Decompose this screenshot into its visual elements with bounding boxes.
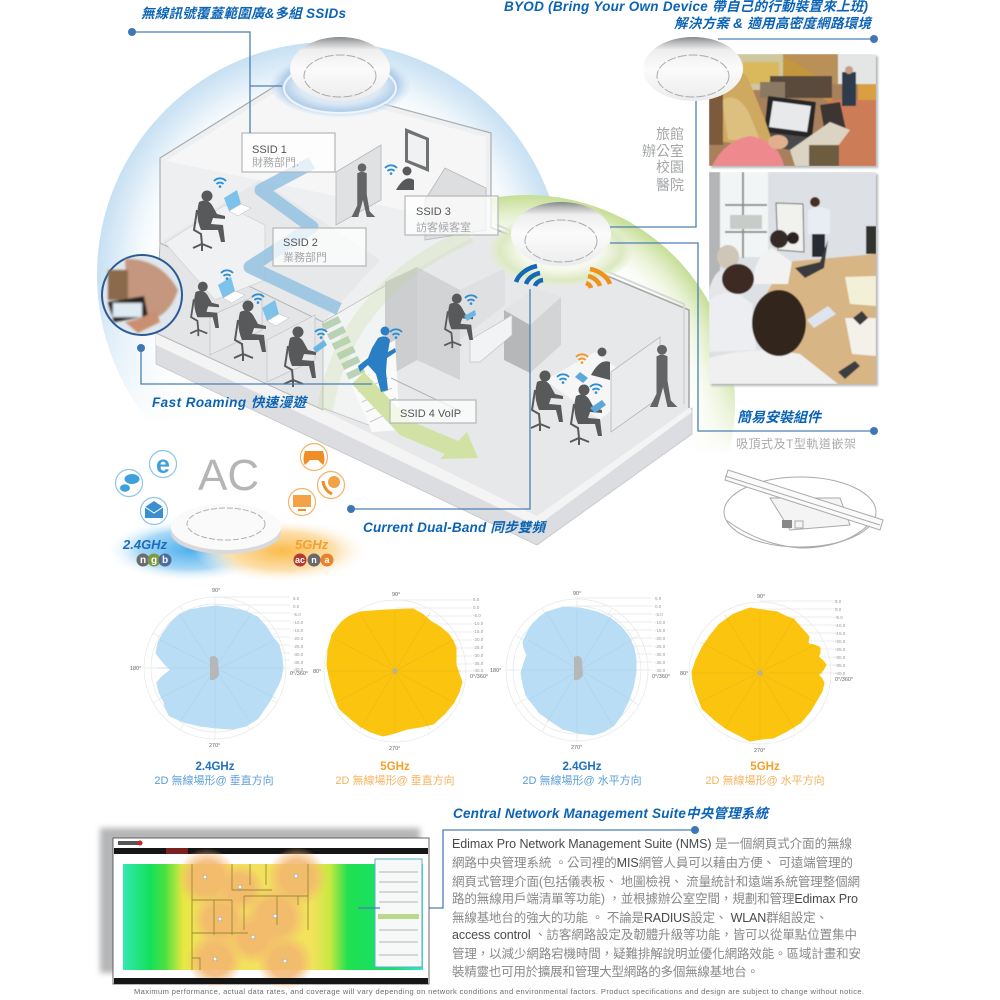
footer bar bbox=[114, 978, 428, 984]
green coverage dome bbox=[323, 195, 735, 448]
ac n a badges: ac bbox=[295, 555, 305, 565]
polar chart: 2.4GHz vertical: -15.0 bbox=[293, 628, 304, 633]
polar chart: 5GHz horizontal: -35.0 bbox=[835, 663, 846, 668]
polar chart: 2.4GHz horizontal: -20.0 bbox=[655, 636, 666, 641]
polar chart: 5GHz vertical bbox=[313, 592, 488, 752]
meeting table and partition bbox=[545, 352, 640, 420]
venue list: 辦公室 bbox=[642, 143, 684, 159]
icon: phone and globe bbox=[318, 472, 344, 498]
venue list: 醫院 bbox=[656, 177, 684, 193]
polar chart: 5GHz vertical: 90° bbox=[392, 592, 400, 598]
n g b badges: b bbox=[162, 555, 168, 566]
n g b badges bbox=[136, 554, 172, 566]
polar chart: 5GHz vertical: 5.0 bbox=[473, 597, 480, 602]
callout: SSID 3: SSID 3 bbox=[416, 206, 451, 218]
polar chart: 5GHz vertical: -40.0 bbox=[473, 668, 484, 673]
polar chart: 2.4GHz horizontal: 0.0 bbox=[655, 604, 662, 609]
polar chart: 2.4GHz horizontal: 0°/360° bbox=[652, 674, 670, 680]
device bbox=[171, 504, 281, 554]
n g b badges: n bbox=[140, 555, 146, 566]
polar chart: 2.4GHz horizontal bbox=[490, 591, 670, 751]
orange 5GHz glow bbox=[194, 519, 370, 583]
ac n a badges: n bbox=[311, 555, 317, 565]
green roaming band and arrow bbox=[325, 235, 478, 459]
polar chart: 5GHz horizontal: 90° bbox=[757, 594, 765, 600]
body text: NMS description: 無線基地台的強大的功能 。 不論是RADIUS設定、 WLAN群組設定、 bbox=[452, 910, 828, 925]
body text: NMS description: access control 、訪客網路設定及韌體升級等功能，皆可以從單點位置集中 bbox=[452, 927, 857, 942]
connector: AP to installation kit bbox=[610, 243, 878, 435]
polar chart: 5GHz horizontal: -10.0 bbox=[835, 623, 846, 628]
heading: central network management: Central Network Management Suite中央管理系統 bbox=[453, 806, 770, 821]
settings panel bbox=[375, 859, 422, 967]
caption: 5GHz horizontal: 2D 無線場形@ 水平方向 bbox=[705, 773, 825, 787]
caption: 5GHz horizontal bbox=[705, 761, 825, 787]
icon: chat bbox=[116, 470, 142, 496]
icon: browser e bbox=[150, 450, 176, 479]
caption: 2.4GHz vertical bbox=[154, 761, 274, 787]
icon: browser e: e bbox=[156, 451, 170, 479]
access point beside photos bbox=[643, 37, 743, 101]
polar chart: 2.4GHz vertical: -35.0 bbox=[293, 660, 304, 665]
polar chart: 5GHz horizontal bbox=[680, 594, 853, 754]
orange signal fan bbox=[586, 269, 610, 288]
screenshot shadow bbox=[100, 828, 420, 973]
caption: 2.4GHz vertical: 2.4GHz bbox=[196, 761, 235, 773]
heatmap connector end bbox=[358, 907, 380, 909]
polar chart: 2.4GHz vertical: -10.0 bbox=[293, 620, 304, 625]
stairs bbox=[345, 340, 400, 432]
blue signal fan bbox=[516, 266, 543, 286]
heading: coverage and SSIDs: 無線訊號覆蓋範圍廣&多組 SSIDs bbox=[141, 6, 346, 21]
callout: SSID 2: 業務部門 bbox=[283, 250, 327, 264]
connector: SSID heading bbox=[128, 28, 282, 133]
polar chart: 5GHz horizontal: 0°/360° bbox=[835, 677, 853, 683]
polar chart: 5GHz vertical: 80° bbox=[313, 669, 321, 675]
callout: SSID 1 bbox=[242, 133, 335, 172]
callout: SSID 2 bbox=[273, 228, 366, 266]
heading: dual-band: Current Dual-Band 同步雙頻 bbox=[363, 520, 548, 535]
polar chart: 2.4GHz horizontal: -40.0 bbox=[655, 668, 666, 673]
polar chart: 5GHz vertical: -35.0 bbox=[473, 661, 484, 666]
desk bbox=[470, 315, 512, 362]
navigation bar bbox=[114, 848, 428, 854]
polar chart: 2.4GHz vertical: -5.0 bbox=[293, 612, 301, 617]
polar chart: 5GHz horizontal: -20.0 bbox=[835, 639, 846, 644]
body text: NMS description bbox=[452, 836, 861, 979]
polar chart: 5GHz horizontal: 80° bbox=[680, 671, 688, 677]
connector: management suite bbox=[358, 826, 699, 908]
heading: BYOD line 2: 解決方案 & 適用高密度網路環境 bbox=[674, 16, 872, 31]
polar chart: 2.4GHz vertical: -20.0 bbox=[293, 636, 304, 641]
body text: NMS description: 裝精靈也可用於擴展和管理大型網路的多個無線基地台。 bbox=[452, 964, 759, 979]
polar chart: 2.4GHz horizontal: -35.0 bbox=[655, 660, 666, 665]
polar chart: 2.4GHz vertical: 90° bbox=[212, 588, 220, 594]
polar chart: 5GHz vertical: -10.0 bbox=[473, 621, 484, 626]
ac n a badges: a bbox=[324, 555, 330, 565]
polar chart: 2.4GHz vertical: 180° bbox=[130, 666, 141, 672]
polar chart: 5GHz vertical: -25.0 bbox=[473, 645, 484, 650]
AC lettering: AC bbox=[198, 451, 259, 500]
icon: game pad bbox=[300, 444, 328, 470]
heading: fast roaming: Fast Roaming 快速漫遊 bbox=[152, 395, 308, 410]
blue 2.4GHz glow bbox=[105, 518, 275, 582]
callout: SSID 4 VoIP bbox=[390, 400, 476, 423]
polar chart: 5GHz vertical: 270° bbox=[389, 746, 400, 752]
upper floor cubicles bbox=[336, 145, 381, 225]
header logo bbox=[118, 840, 142, 846]
right wing floor bbox=[323, 227, 689, 516]
polar chart: 2.4GHz horizontal: -10.0 bbox=[655, 620, 666, 625]
footer disclaimer: Maximum performance, actual data rates, and coverage will vary depending on network conditions and environmental factors. Product specifications and design are subject to change without notice. bbox=[134, 987, 864, 996]
venue list: 旅館 bbox=[656, 126, 684, 142]
callout: SSID 4 VoIP: SSID 4 VoIP bbox=[400, 408, 461, 420]
polar chart: 5GHz horizontal: -15.0 bbox=[835, 631, 846, 636]
polar chart: 5GHz vertical: 0°/360° bbox=[470, 674, 488, 680]
ac n a badges bbox=[294, 554, 334, 566]
connector: dual-band bbox=[347, 289, 530, 513]
dual-band AC device bbox=[105, 444, 370, 583]
callout: SSID 2: SSID 2 bbox=[283, 237, 318, 249]
polar chart: 2.4GHz vertical: -25.0 bbox=[293, 644, 304, 649]
2.4GHz label: 2.4GHz bbox=[122, 537, 168, 552]
cabinet bbox=[504, 288, 561, 373]
icon: monitor bbox=[288, 488, 316, 516]
upper floor bbox=[160, 78, 491, 322]
roaming blue person bbox=[358, 326, 396, 392]
caption: 2.4GHz vertical: 2D 無線場形@ 垂直方向 bbox=[154, 773, 274, 787]
polar chart: 2.4GHz vertical: 0°/360° bbox=[290, 671, 308, 677]
caption: 2.4GHz horizontal: 2.4GHz bbox=[562, 761, 602, 773]
caption: 5GHz vertical bbox=[335, 761, 455, 787]
office workers bbox=[190, 163, 677, 445]
polar chart: 2.4GHz horizontal: 90° bbox=[573, 591, 581, 597]
polar chart: 5GHz vertical: -15.0 bbox=[473, 629, 484, 634]
lower floor cubicles bbox=[210, 293, 262, 355]
polar chart: 5GHz vertical: -30.0 bbox=[473, 653, 484, 658]
polar chart: 2.4GHz horizontal: -15.0 bbox=[655, 628, 666, 633]
polar chart: 5GHz horizontal: 5.0 bbox=[835, 599, 842, 604]
callout: SSID 3 bbox=[405, 196, 498, 235]
polar chart: 5GHz horizontal: 270° bbox=[754, 748, 765, 754]
caption: 5GHz horizontal: 5GHz bbox=[750, 761, 780, 773]
polar chart: 5GHz vertical: -20.0 bbox=[473, 637, 484, 642]
polar chart: 5GHz horizontal: 0.0 bbox=[835, 607, 842, 612]
text: ceiling and T-rail mount: 吸頂式及T型軌道嵌架 bbox=[736, 436, 856, 451]
photo: classroom bbox=[709, 54, 878, 168]
blue coverage dome bbox=[97, 42, 550, 402]
NMS heatmap screenshot bbox=[113, 838, 429, 990]
polar chart: 2.4GHz vertical: -40.0 bbox=[293, 667, 304, 672]
line drawing: mounting kit bbox=[724, 470, 883, 548]
caption: 5GHz vertical: 5GHz bbox=[380, 761, 410, 773]
interior walls bbox=[323, 270, 412, 430]
blue SSID path band bbox=[250, 163, 339, 309]
body text: NMS description: Edimax Pro Network Management Suite (NMS) 是一個網頁式介面的無線 bbox=[452, 836, 852, 851]
icon: mail bbox=[140, 498, 168, 524]
body text: NMS description: 網頁式管理介面(包括儀表板、 地圖檢視、 流量統計和遠端系統管理整個網 bbox=[452, 874, 860, 889]
caption: 2.4GHz horizontal: 2D 無線場形@ 水平方向 bbox=[522, 773, 642, 787]
connector: fast roaming bbox=[137, 344, 372, 384]
polar chart: 5GHz horizontal: -40.0 bbox=[835, 671, 846, 676]
connector: BYOD bbox=[718, 35, 878, 43]
callout: SSID 1: 財務部門. bbox=[252, 155, 299, 169]
polar chart: 2.4GHz horizontal: 180° bbox=[490, 668, 501, 674]
small wifi icons bbox=[214, 165, 602, 394]
polar chart: 5GHz horizontal: -5.0 bbox=[835, 615, 843, 620]
venue list: 校園 bbox=[656, 159, 684, 175]
heatmap bbox=[123, 847, 423, 990]
callout: SSID 3: 訪客候客室 bbox=[416, 220, 471, 234]
polar chart: 2.4GHz vertical: 5.0 bbox=[293, 596, 300, 601]
heading: easy install: 簡易安裝組件 bbox=[737, 409, 823, 425]
body text: NMS description: 網路中央管理系統 。公司裡的MIS網管人員可以藉由方便、 可遠端管理的 bbox=[452, 855, 853, 870]
lower floor left bbox=[156, 243, 323, 410]
polar chart: 2.4GHz vertical: -30.0 bbox=[293, 652, 304, 657]
polar chart: 2.4GHz vertical: 0.0 bbox=[293, 604, 300, 609]
polar chart: 2.4GHz horizontal: 5.0 bbox=[655, 596, 662, 601]
building base slab bbox=[156, 333, 692, 545]
5GHz label: 5GHz bbox=[295, 537, 329, 552]
polar chart: 2.4GHz horizontal: 270° bbox=[571, 745, 582, 751]
polar chart: 5GHz horizontal: -30.0 bbox=[835, 655, 846, 660]
polar chart: 5GHz vertical: 0.0 bbox=[473, 605, 480, 610]
polar chart: 2.4GHz vertical bbox=[130, 588, 308, 749]
polar chart: 5GHz horizontal: -25.0 bbox=[835, 647, 846, 652]
venue list bbox=[642, 126, 684, 193]
polar chart: 2.4GHz horizontal: -5.0 bbox=[655, 612, 663, 617]
access point with green rings and wifi fans bbox=[489, 202, 633, 288]
circular tablet photo bbox=[102, 255, 182, 335]
caption: 2.4GHz horizontal bbox=[522, 761, 642, 787]
n g b badges: g bbox=[151, 555, 157, 566]
caption: 5GHz vertical: 2D 無線場形@ 垂直方向 bbox=[335, 773, 455, 787]
photo: meeting room bbox=[709, 172, 878, 386]
callout: SSID 1: SSID 1 bbox=[252, 144, 287, 156]
polar chart: 2.4GHz horizontal: -25.0 bbox=[655, 644, 666, 649]
polar chart: 2.4GHz horizontal: -30.0 bbox=[655, 652, 666, 657]
body text: NMS description: 管理，以減少網路宕機時間，疑難排解說明並優化網路效能。區域計畫和安 bbox=[452, 946, 861, 961]
polar chart: 5GHz vertical: -5.0 bbox=[473, 613, 481, 618]
connector: AP to venue list bbox=[610, 98, 696, 227]
body text: NMS description: 路的無線用戶端清單等功能) ，並根據辦公室空間，規劃和管理Edimax Pro bbox=[452, 891, 858, 906]
access point with blue rings bbox=[270, 37, 410, 117]
polar chart: 2.4GHz vertical: 270° bbox=[209, 743, 220, 749]
isometric office building bbox=[156, 78, 692, 545]
